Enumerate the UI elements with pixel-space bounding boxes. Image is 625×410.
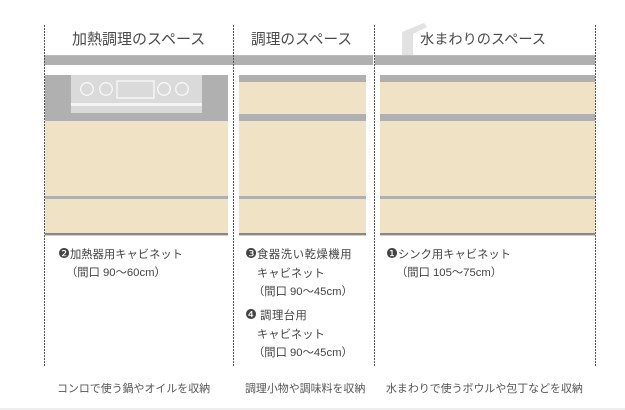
heading: water space: 水まわりのスペース bbox=[420, 32, 546, 48]
label: dishwasher cabinet bbox=[245, 246, 353, 298]
cabinet: dishwasher panel bbox=[239, 82, 366, 114]
label: prep cabinet: キャビネット bbox=[257, 328, 325, 340]
cabinet: sink panel bbox=[380, 82, 595, 114]
label: cooking cabinet: ❷ bbox=[58, 246, 70, 262]
cabinet: prep lower drawer bbox=[239, 199, 366, 233]
label: prep cabinet: 調理台用 bbox=[260, 310, 307, 322]
caption: water: 水まわりで使うボウルや包丁などを収納 bbox=[386, 383, 583, 395]
text: （間口 90～60cm） bbox=[66, 267, 166, 279]
label: dishwasher cabinet: ❸ bbox=[245, 246, 257, 262]
label: sink cabinet bbox=[386, 246, 511, 262]
label: sink cabinet: シンク用キャビネット bbox=[398, 249, 511, 261]
label: dishwasher cabinet: （間口 90～45cm） bbox=[253, 286, 353, 298]
text: （間口 105～75cm） bbox=[396, 267, 502, 279]
cabinet: sink lower drawer bbox=[380, 199, 595, 233]
caption: cooking: コンロで使う鍋やオイルを収納 bbox=[57, 383, 210, 395]
caption: prep: 調理小物や調味料を収納 bbox=[245, 383, 365, 395]
label: cooking cabinet bbox=[58, 246, 183, 262]
label: dishwasher cabinet: 食器洗い乾燥機用 bbox=[257, 249, 352, 261]
label: dishwasher cabinet: キャビネット bbox=[257, 268, 325, 280]
cabinet: prep upper drawer bbox=[239, 121, 366, 196]
stove unit bbox=[45, 75, 228, 121]
cabinet: sink upper drawer bbox=[380, 121, 595, 196]
cabinet: cooking upper drawer bbox=[45, 121, 228, 196]
bottom edge band bbox=[0, 408, 625, 410]
heading: prep space: 調理のスペース bbox=[251, 32, 352, 48]
label: prep cabinet bbox=[245, 307, 353, 359]
label: sink cabinet: ❶ bbox=[386, 246, 398, 262]
label: prep cabinet: （間口 90～45cm） bbox=[253, 347, 353, 359]
label: prep cabinet: ❹ bbox=[245, 307, 257, 323]
icon: faucet bbox=[402, 23, 427, 55]
heading: cooking space: 加熱調理のスペース bbox=[72, 31, 205, 48]
stove panel bbox=[71, 75, 202, 113]
worktop bar bbox=[44, 55, 595, 65]
cabinet: cooking lower drawer bbox=[45, 199, 228, 233]
label: cooking cabinet: 加熱器用キャビネット bbox=[70, 249, 183, 261]
